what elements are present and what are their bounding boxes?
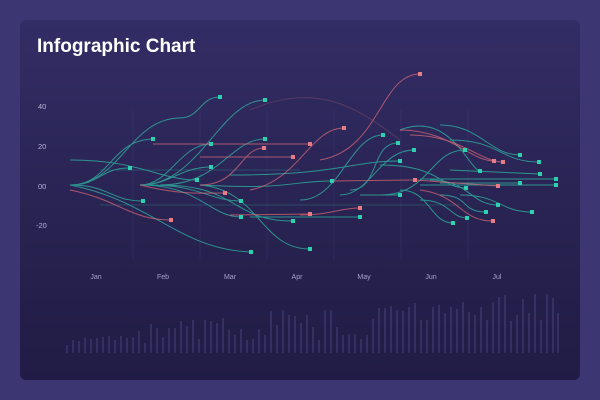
y axis labels: 20 xyxy=(38,142,46,151)
x axis month labels: Jun xyxy=(425,274,437,281)
bar chart: volume xyxy=(66,294,559,353)
line chart: teal flows xyxy=(70,97,556,252)
markers: teal xyxy=(128,95,558,254)
x axis month labels: Feb xyxy=(157,274,169,281)
x axis month labels: Apr xyxy=(292,274,303,281)
line chart: red flows xyxy=(70,74,503,221)
markers: red xyxy=(169,72,505,223)
x axis month labels: Mar xyxy=(224,274,237,281)
y axis labels: 40 xyxy=(38,102,46,111)
y axis labels xyxy=(36,102,47,230)
x axis month labels: Jul xyxy=(493,274,502,281)
y axis labels: -20 xyxy=(36,221,47,230)
x axis month labels: Jan xyxy=(90,274,102,281)
title: Infographic Chart xyxy=(37,36,195,57)
x axis month labels xyxy=(90,274,502,281)
y axis labels: 00 xyxy=(38,182,46,191)
x axis month labels: May xyxy=(357,274,371,281)
